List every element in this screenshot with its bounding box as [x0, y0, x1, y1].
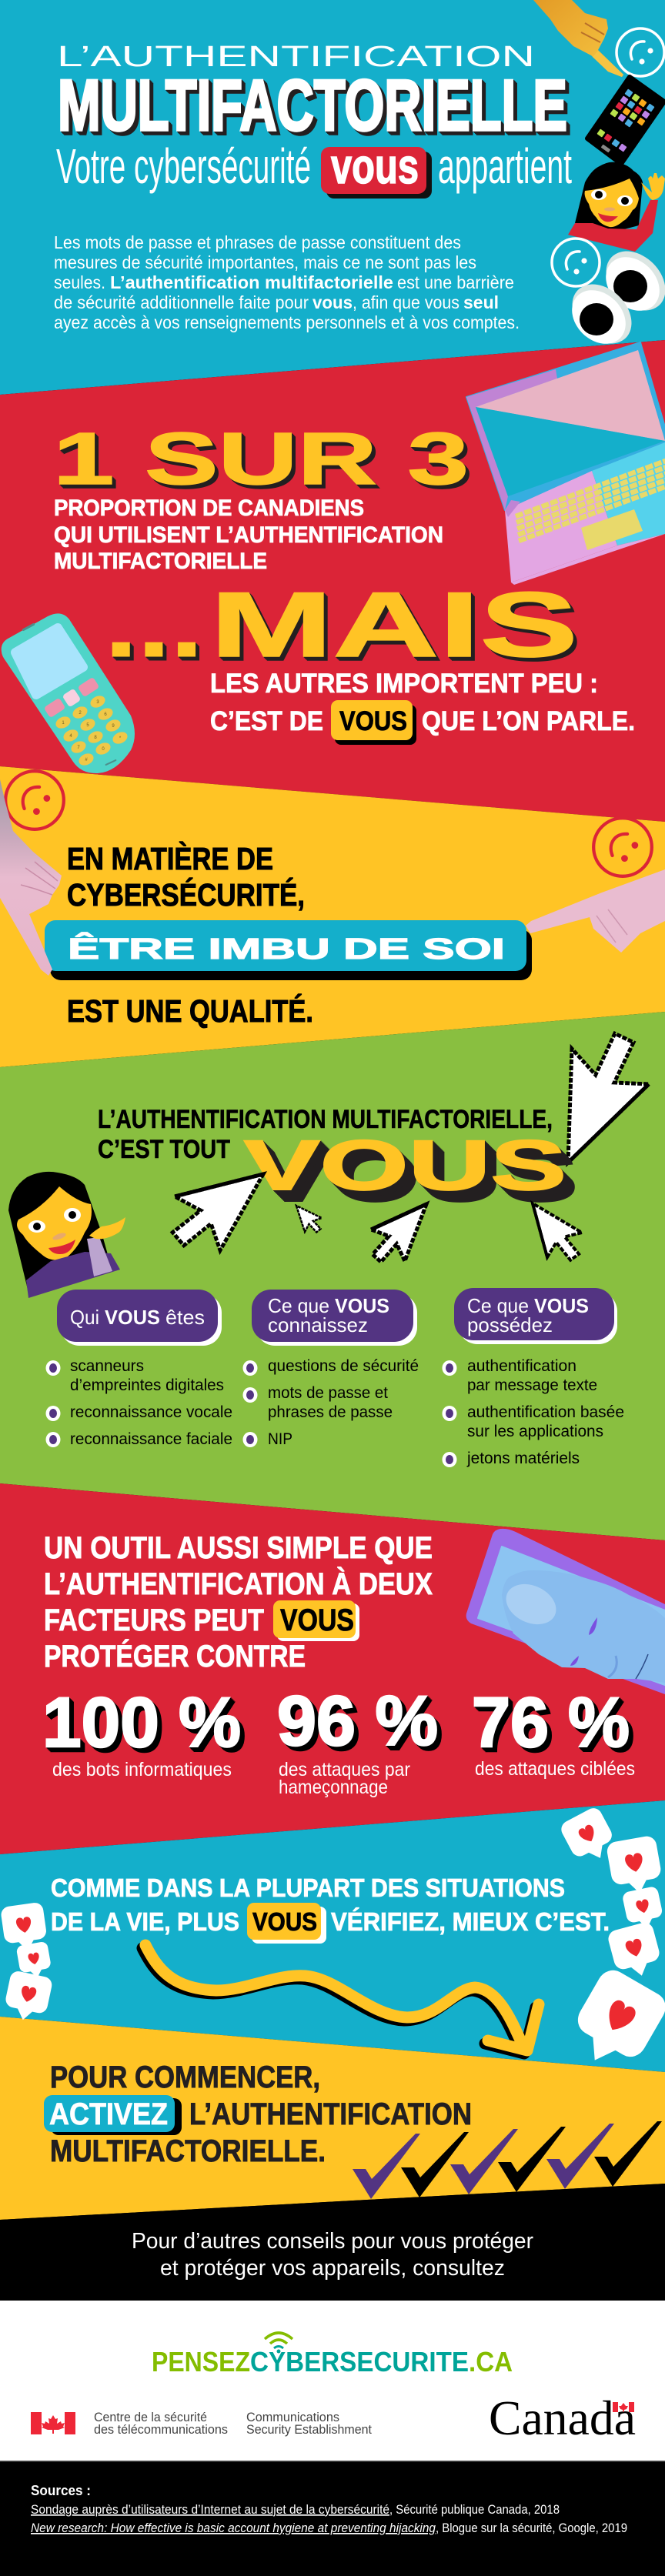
icon: white smiley top	[617, 28, 664, 76]
heading: comme dans la plupart	[51, 1874, 610, 1944]
icon: teal mobile phone: 5	[86, 723, 89, 728]
icon: check marks	[353, 2121, 662, 2199]
icon: face on tablet	[466, 1529, 665, 1694]
heading: pour commencer: POUR COMMENCER,	[50, 2060, 320, 2094]
title line 1: L’AUTHENTIFICATION	[57, 41, 535, 73]
name: french: des télécommunications	[94, 2422, 228, 2437]
panel: ce que vous possédez	[454, 1288, 617, 1344]
panel: statistics background	[0, 1483, 665, 1854]
icon: teal mobile phone	[2, 613, 135, 773]
text: more tips: et protéger vos appareils, consultez	[160, 2256, 505, 2281]
name: english: Security Establishment	[246, 2422, 372, 2437]
intro paragraph: de sécurité additionnelle faite pour	[54, 292, 309, 312]
logo: pensezcybersecurite.ca: CYBERSECURITE	[250, 2346, 469, 2377]
list: qui vous êtes: scanneurs	[70, 1357, 144, 1375]
label	[279, 1759, 410, 1798]
label: hameçonnage	[279, 1777, 388, 1798]
stat description: QUI UTILISENT L’AUTHENTIFICATION	[54, 522, 443, 548]
icon: like bubble 1	[558, 1805, 620, 1868]
logo: canada wordmark: Canada	[489, 2391, 636, 2445]
heading: pour commencer	[44, 2060, 472, 2168]
stat description: MULTIFACTORIELLE	[54, 549, 267, 574]
pill: être imbu de soi: ÊTRE IMBU DE SOI	[68, 932, 505, 966]
pill: être imbu de soi	[45, 920, 532, 980]
list: ce que vous connaissez: phrases de passe	[268, 1403, 393, 1421]
stat: 76 %: 76 %	[472, 1683, 630, 1762]
subtitle pill: vous	[331, 138, 419, 194]
heading: en matière de cybersécurité: CYBERSÉCURITÉ,	[67, 877, 305, 913]
logo: canada flag signature	[31, 2410, 372, 2437]
heading: un outil aussi simple: L’AUTHENTIFICATION À DEUX	[44, 1567, 433, 1601]
panel: verify background	[0, 1800, 665, 2072]
intro paragraph: vous	[312, 292, 353, 312]
intro paragraph: ayez accès à vos renseignements personnels et à vos comptes.	[54, 312, 520, 332]
icon: large pixel cursor	[568, 1032, 650, 1166]
intro paragraph: seules.	[54, 272, 105, 292]
intro paragraph: est une barrière	[397, 272, 514, 292]
text: others matter little	[210, 669, 635, 745]
heading: est une qualité: EST UNE QUALITÉ.	[67, 993, 313, 1029]
panel: ce que vous connaissez: Ce que	[268, 1294, 329, 1317]
icon: white smiley second	[552, 239, 600, 286]
list: qui vous êtes: d’empreintes digitales	[70, 1376, 224, 1394]
sources: Sondage auprès d’utilisateurs d’Internet au sujet de la cybersécurité	[31, 2502, 389, 2517]
list: ce que vous connaissez: mots de passe et	[268, 1384, 388, 1402]
name: english: Communications	[246, 2410, 339, 2424]
list: ce que vous possédez: sur les applications	[467, 1423, 603, 1440]
headline: mais: ...	[105, 573, 203, 676]
icon: red smiley left	[5, 771, 64, 829]
name: french: Centre de la sécurité	[94, 2410, 207, 2424]
logo: pensezcybersecurite.ca: .CA	[469, 2346, 513, 2377]
label: des attaques ciblées	[475, 1758, 635, 1780]
panel: intro background	[0, 0, 665, 395]
stat: 96 %	[277, 1682, 438, 1798]
heading: un outil aussi simple	[44, 1531, 433, 1673]
sources	[31, 2483, 627, 2535]
heading: pour commencer: L’AUTHENTIFICATION	[189, 2097, 472, 2131]
sources: , Blogue sur la sécurité, Google, 2019	[436, 2521, 627, 2535]
panel: sources background	[0, 2461, 665, 2576]
icon: like bubble 6	[0, 1902, 48, 1954]
list: ce que vous connaissez: questions de sécurité	[268, 1357, 419, 1375]
icon: teal mobile phone: 2	[79, 711, 82, 716]
panel: more tips background	[0, 2184, 665, 2301]
stat description	[54, 496, 443, 574]
panel: logos background	[0, 2301, 665, 2461]
big vous: VOUS	[244, 1126, 566, 1205]
heading: comme dans la plupart: COMME DANS LA PLUPART DES SITUATIONS	[51, 1874, 565, 1902]
pill: vous	[247, 1903, 326, 1944]
icon: teal mobile phone: 4	[69, 734, 72, 739]
logo: pensezcybersecurite.ca	[152, 2333, 513, 2377]
icon: right cursor	[533, 1194, 588, 1265]
icon: like bubble 2	[606, 1835, 664, 1897]
list: qui vous êtes	[46, 1357, 232, 1448]
heading: un outil aussi simple: FACTEURS PEUT	[44, 1603, 264, 1637]
icon: teal mobile phone: 6	[104, 712, 107, 717]
heading: un outil aussi simple: UN OUTIL AUSSI SIMPLE QUE	[44, 1531, 433, 1565]
arrow: curvy yellow	[142, 1945, 539, 2054]
sources: New research: How effective is basic account hygiene at preventing hijacking	[31, 2521, 436, 2535]
heading: en matière de cybersécurité	[67, 841, 305, 913]
panel: ce que vous connaissez: VOUS	[335, 1294, 389, 1317]
panel: qui vous êtes: Qui	[70, 1306, 99, 1329]
list: ce que vous possédez: par message texte	[467, 1376, 597, 1394]
panel: imbu de soi background	[0, 766, 665, 1067]
sources: Sources :	[31, 2483, 91, 2498]
stat description: PROPORTION DE CANADIENS	[54, 496, 364, 521]
icon: like bubble 4	[607, 1920, 664, 1981]
icon: googly eyes	[560, 239, 665, 355]
panel: qui vous êtes	[57, 1290, 222, 1346]
heading: c'est tout vous: C’EST TOUT	[98, 1135, 230, 1164]
icon: like bubble 7	[16, 1941, 53, 1980]
icon: yellow pointing hand	[533, 0, 623, 77]
name: french	[94, 2410, 228, 2437]
heading: comme dans la plupart: DE LA VIE, PLUS	[51, 1907, 239, 1936]
text: others matter little: C’EST DE	[210, 706, 323, 736]
panel: qui vous êtes: VOUS	[105, 1306, 160, 1329]
icon: small cursor	[296, 1200, 326, 1236]
icon: smartphone with apps	[587, 77, 664, 164]
list: ce que vous possédez: authentification	[467, 1357, 576, 1375]
pill: vous: VOUS	[280, 1603, 354, 1637]
subtitle end: appartient	[438, 138, 572, 194]
icon: teal mobile phone: 7	[77, 746, 80, 750]
icon: pink hand left	[0, 779, 62, 976]
icon: red smiley right	[593, 818, 652, 876]
headline: mais: MAIS	[210, 573, 578, 676]
icon: teal mobile phone: 9	[112, 724, 115, 729]
list: ce que vous possédez: authentification basée	[467, 1403, 624, 1421]
sources: , Sécurité publique Canada, 2018	[389, 2502, 560, 2517]
icon: like bubble 5	[563, 1965, 665, 2079]
panel: ce que vous connaissez	[252, 1290, 417, 1346]
stat headline: 1 sur 3: 1 SUR 3	[53, 418, 469, 500]
icon: pixel cursor left	[162, 1174, 284, 1260]
list: ce que vous connaissez	[243, 1357, 419, 1448]
heading: pour commencer: MULTIFACTORIELLE.	[50, 2134, 326, 2168]
subtitle start: Votre cybersécurité	[56, 138, 311, 194]
list: ce que vous possédez	[442, 1357, 624, 1467]
panel: factors background	[0, 1012, 665, 1540]
icon: woman with scarf	[8, 1172, 125, 1298]
icon: like bubble 3	[622, 1886, 665, 1932]
list: ce que vous connaissez: NIP	[268, 1430, 292, 1448]
list: ce que vous possédez: jetons matériels	[466, 1450, 580, 1467]
list: qui vous êtes: reconnaissance faciale	[70, 1430, 232, 1448]
stat: 100 %: 100 %	[42, 1683, 241, 1762]
label: des attaques par	[279, 1759, 410, 1780]
pill: vous: VOUS	[339, 706, 407, 736]
intro paragraph: mesures de sécurité importantes, mais ce ne sont pas les	[54, 252, 476, 272]
icon: teal mobile phone: 0	[102, 747, 105, 752]
pill: vous: VOUS	[252, 1907, 317, 1936]
line	[0, 2461, 665, 2462]
logo: pensezcybersecurite.ca: PENSEZ	[152, 2346, 250, 2377]
icon: teal mobile phone: 3	[96, 700, 99, 705]
text: others matter little: LES AUTRES IMPORTENT PEU :	[210, 669, 598, 699]
pill: vous	[331, 700, 416, 745]
panel: ce que vous possédez: possédez	[467, 1313, 553, 1336]
panel: get started background	[0, 2017, 665, 2220]
panel: ce que vous possédez: Ce que	[467, 1294, 529, 1317]
heading: c'est tout vous	[98, 1105, 566, 1205]
label: des bots informatiques	[52, 1759, 232, 1780]
icon: laptop	[466, 342, 665, 585]
intro paragraph	[54, 232, 520, 332]
heading: en matière de cybersécurité: EN MATIÈRE DE	[67, 841, 273, 876]
name: english	[246, 2410, 372, 2437]
panel: ce que vous connaissez: connaissez	[268, 1313, 368, 1336]
icon: woman waving	[568, 162, 665, 252]
panel: ce que vous possédez: VOUS	[534, 1294, 589, 1317]
icon: teal mobile phone: 8	[94, 736, 97, 740]
heading: un outil aussi simple: PROTÉGER CONTRE	[44, 1639, 306, 1673]
icon: like bubble 8	[2, 1970, 53, 2024]
title	[56, 41, 572, 199]
text: more tips	[132, 2229, 533, 2281]
icon: teal mobile phone: #	[85, 758, 88, 762]
list: qui vous êtes: reconnaissance vocale	[70, 1403, 232, 1421]
intro paragraph: L’authentification multifactorielle	[110, 272, 393, 292]
text: others matter little: QUE L’ON PARLE.	[422, 706, 635, 736]
headline: mais	[105, 573, 578, 676]
intro paragraph: Les mots de passe et phrases de passe constituent des	[54, 232, 461, 252]
pill: activez: ACTIVEZ	[49, 2097, 168, 2131]
icon: pink hand right	[526, 869, 665, 953]
panel: qui vous êtes: êtes	[165, 1306, 205, 1329]
icon: medium cursor	[363, 1204, 445, 1272]
icon: teal mobile phone: *	[119, 736, 122, 741]
heading: c'est tout vous: L’AUTHENTIFICATION MULTIFACTORIELLE,	[98, 1105, 553, 1134]
stat: 96 %: 96 %	[277, 1682, 438, 1760]
icon: teal mobile phone: 1	[62, 721, 65, 726]
text: more tips: Pour d’autres conseils pour vous protéger	[132, 2229, 533, 2254]
intro paragraph: seul	[463, 292, 499, 312]
intro paragraph: , afin que vous	[353, 292, 459, 312]
panel: 1 sur 3 background	[0, 340, 665, 822]
heading: comme dans la plupart: VÉRIFIEZ, MIEUX C’EST.	[331, 1907, 610, 1936]
